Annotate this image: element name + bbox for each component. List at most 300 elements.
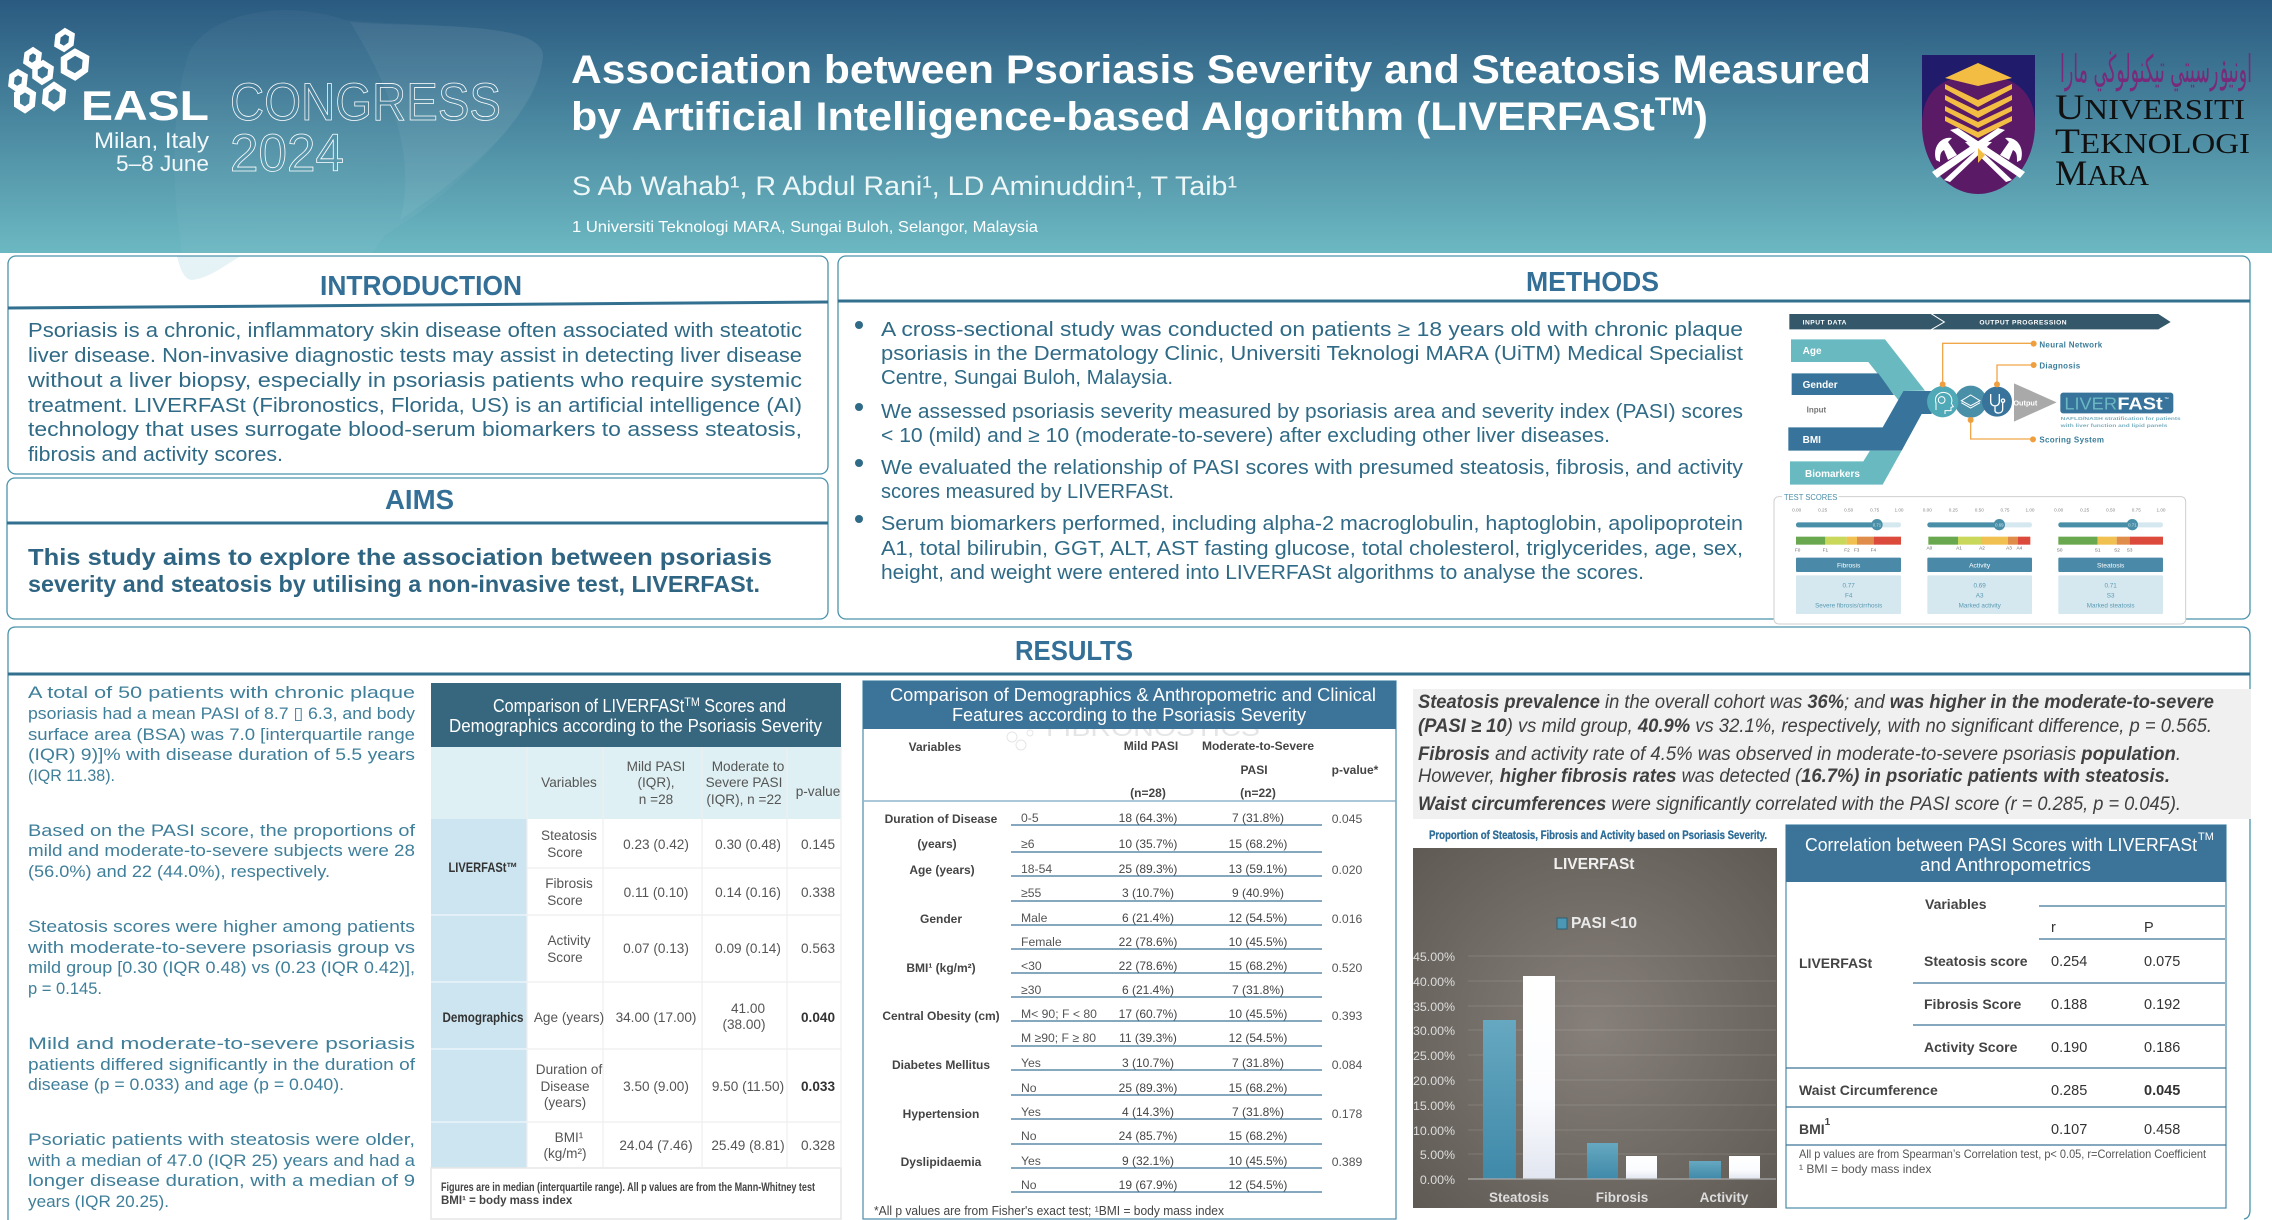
introduction text xyxy=(27,320,802,466)
column headers: n =28 xyxy=(639,792,673,807)
label: neural network: Neural Network xyxy=(2039,341,2103,350)
r and P values: 0.186 xyxy=(2144,1040,2180,1056)
rows: 0.07 (0.13) xyxy=(623,941,689,956)
introduction text: liver disease. Non-invasive diagnostic tests may assist in detecting liver disease xyxy=(28,345,802,367)
row categories: Male xyxy=(1021,911,1048,925)
affiliation: 1 Universiti Teknologi MARA, Sungai Buloh, Selangor, Malaysia xyxy=(572,219,1038,236)
r and P values: 0.188 xyxy=(2051,997,2087,1013)
table heading: Comparison of LIVERFASt xyxy=(493,696,706,716)
y axis labels xyxy=(1413,950,1455,1187)
output arrow: Output xyxy=(2013,398,2038,407)
moderate-to-severe values: 7 (31.8%) xyxy=(1232,983,1284,997)
icon: layers xyxy=(1961,395,1980,408)
score: activity: A0 xyxy=(1926,546,1933,551)
methods bullet 2: We assessed psoriasis severity measured by psoriasis area and severity index (PASI) scores xyxy=(881,401,1743,423)
methods bullet 3 xyxy=(855,457,1743,503)
row categories: No xyxy=(1021,1129,1037,1143)
row rules xyxy=(1011,825,1322,1192)
moderate-to-severe values: 10 (45.5%) xyxy=(1229,1154,1287,1168)
rows: Activity xyxy=(547,933,591,948)
results paragraph 2: Based on the PASI score, the proportions of xyxy=(28,821,415,840)
moderate-to-severe values: 12 (54.5%) xyxy=(1229,1031,1287,1045)
results paragraph 3: Steatosis scores were higher among patients xyxy=(28,917,415,936)
mild PASI values: 22 (78.6%) xyxy=(1119,935,1177,949)
heading: introduction: INTRODUCTION xyxy=(320,270,522,301)
watermark xyxy=(1007,715,1260,750)
results paragraph 1 xyxy=(28,683,416,785)
watermark: FIBRONOSTICS xyxy=(1046,715,1260,742)
methods bullet 2: < 10 (mild) and ≥ 10 (moderate-to-severe) after excluding other liver diseases. xyxy=(881,425,1610,447)
score: steatosis: S0 xyxy=(2057,548,2063,553)
results paragraph 4 xyxy=(28,1034,415,1094)
EASL Congress logo: EASL xyxy=(81,82,209,129)
row group labels: Dyslipidaemia xyxy=(901,1155,982,1169)
methods bullet 1: A cross-sectional study was conducted on patients ≥ 18 years old with chronic plaque xyxy=(881,319,1743,341)
score: steatosis: 1.00 xyxy=(2156,508,2166,513)
table heading: Demographics according to the Psoriasis Severity xyxy=(449,716,822,736)
score: activity: A3 xyxy=(2006,546,2012,551)
bar chart: LIVERFASt proportions xyxy=(1413,848,1777,1208)
score: steatosis: Steatosis xyxy=(2097,563,2125,570)
rows: Score xyxy=(547,950,583,965)
score: steatosis: Marked steatosis xyxy=(2087,603,2135,610)
row categories: Female xyxy=(1021,935,1062,949)
EASL Congress logo: 2024 xyxy=(230,124,344,183)
rows: 9.50 (11.50) xyxy=(712,1079,784,1094)
row group labels: Diabetes Mellitus xyxy=(892,1058,990,1072)
row categories: Yes xyxy=(1021,1154,1041,1168)
score: activity: 1.00 xyxy=(2025,508,2035,513)
key findings box: (PASI ≥ 10) vs mild group, 40.9% vs 32.1%, respectively, with no significant difference, p = 0.565. xyxy=(1418,716,2212,737)
moderate-to-severe values: 15 (68.2%) xyxy=(1229,959,1287,973)
input: age: Age xyxy=(1803,346,1822,357)
r and P values xyxy=(2051,920,2180,1138)
rows: 25.49 (8.81) xyxy=(711,1138,785,1153)
row group labels: Central Obesity (cm) xyxy=(882,1009,1000,1023)
p values: 0.020 xyxy=(1332,863,1362,877)
x axis labels: Activity xyxy=(1700,1190,1749,1205)
chart legend: PASI <10 xyxy=(1571,915,1637,932)
table: demographics and clinical features xyxy=(863,681,1396,1219)
rows: (38.00) xyxy=(722,1017,766,1032)
methods diagram: LIVERFASt algorithm xyxy=(1774,314,2186,624)
moderate-to-severe values: 15 (68.2%) xyxy=(1229,837,1287,851)
row group labels: BMI¹ (kg/m²) xyxy=(906,961,976,975)
y axis labels: 45.00% xyxy=(1413,950,1455,964)
rows: Duration of xyxy=(536,1062,602,1077)
row categories: No xyxy=(1021,1178,1037,1192)
mild PASI values xyxy=(1119,811,1177,1192)
LIVERFASt caption: NAFLD/NASH stratification for patients xyxy=(2061,416,2181,422)
r and P values: 0.285 xyxy=(2051,1083,2087,1099)
variable labels: 1 xyxy=(1825,1117,1831,1128)
connector lines xyxy=(1943,343,2033,439)
p values: 0.045 xyxy=(1332,812,1362,826)
y axis labels: 0.00% xyxy=(1420,1173,1455,1187)
score: steatosis: 0.71 xyxy=(2104,583,2117,590)
score: steatosis: S2 xyxy=(2114,548,2120,553)
row categories: ≥30 xyxy=(1021,983,1041,997)
results paragraph 4: patients differed significantly in the duration of xyxy=(28,1055,415,1074)
rows: 0.23 (0.42) xyxy=(623,837,689,852)
column headers: Moderate-to-Severe xyxy=(1202,739,1314,753)
r and P values: 0.192 xyxy=(2144,997,2180,1013)
title: TM xyxy=(1655,93,1694,121)
introduction text: technology that uses surrogate blood-serum biomarkers to assess steatosis, xyxy=(28,419,802,441)
rows: Age (years) xyxy=(534,1010,604,1025)
score: activity: A1 xyxy=(1956,546,1962,551)
arrow: input data xyxy=(1789,314,1943,329)
panel: test scores: TEST SCORES xyxy=(1784,493,1837,502)
key findings box: Fibrosis and activity rate of 4.5% was observed in moderate-to-severe psoriasis population. xyxy=(1418,744,2181,765)
column headers: Moderate to xyxy=(712,759,784,774)
label: diagnosis: Diagnosis xyxy=(2039,362,2081,371)
results paragraph 5: with a median of 47.0 (IQR 25) years and had a xyxy=(27,1151,416,1170)
results summary text xyxy=(27,683,416,1211)
mild PASI values: 19 (67.9%) xyxy=(1119,1178,1177,1192)
moderate-to-severe values: 10 (45.5%) xyxy=(1229,1007,1287,1021)
score: steatosis xyxy=(2054,508,2166,614)
mild PASI values: 25 (89.3%) xyxy=(1119,862,1177,876)
results paragraph 5: years (IQR 20.25). xyxy=(28,1192,169,1211)
column headers: Variables xyxy=(909,740,962,754)
r and P values: 0.254 xyxy=(2051,954,2087,970)
header banner xyxy=(0,0,2272,253)
moderate-to-severe values: 12 (54.5%) xyxy=(1229,1178,1287,1192)
key findings box: However, higher fibrosis rates was detected (16.7%) in psoriatic patients with steatosis. xyxy=(1418,766,2170,787)
moderate-to-severe values: 15 (68.2%) xyxy=(1229,1081,1287,1095)
EASL Congress logo: Milan, Italy xyxy=(94,128,209,153)
bars: steatosis xyxy=(1483,976,1555,1179)
score: activity xyxy=(1923,508,2035,614)
score: steatosis: 0.50 xyxy=(2106,508,2116,513)
column headers xyxy=(541,759,840,807)
methods bullet 4 xyxy=(855,513,1743,584)
y axis labels: 30.00% xyxy=(1413,1024,1455,1038)
score: fibrosis: 0.00 xyxy=(1792,508,1802,513)
column headers: Variables xyxy=(541,775,597,790)
score: steatosis: 0.25 xyxy=(2080,508,2090,513)
EASL Congress logo: 5–8 June xyxy=(116,151,209,176)
results paragraph 5 xyxy=(27,1130,416,1211)
results paragraph 1: (IQR) 9)]% with disease duration of 5.5 years xyxy=(28,745,415,764)
results paragraph 1: A total of 50 patients with chronic plaque xyxy=(28,683,415,702)
y axis labels: 20.00% xyxy=(1413,1074,1455,1088)
LIVERFASt logo: ™ xyxy=(2164,397,2169,402)
LIVERFASt logo: FASt xyxy=(2117,393,2163,413)
y axis labels: 25.00% xyxy=(1413,1049,1455,1063)
title: by Artificial Intelligence-based Algorithm (LIVERFASt xyxy=(571,95,1579,139)
score: activity: 0.75 xyxy=(2000,508,2010,513)
variable labels: Steatosis score xyxy=(1924,953,2028,969)
mild PASI values: 22 (78.6%) xyxy=(1119,959,1177,973)
moderate-to-severe values: 7 (31.8%) xyxy=(1232,811,1284,825)
table heading xyxy=(449,695,822,736)
score: fibrosis: 0.25 xyxy=(1818,508,1828,513)
y axis labels: 5.00% xyxy=(1420,1148,1455,1162)
UiTM wordmark xyxy=(2055,47,2252,193)
table footnote: All p values are from Spearman’s Correlation test, p< 0.05, r=Correlation Coefficient xyxy=(1799,1147,2207,1161)
title: Association between Psoriasis Severity and Steatosis Measured xyxy=(571,48,1871,92)
mild PASI values: 6 (21.4%) xyxy=(1122,911,1174,925)
results paragraph 5: Psoriatic patients with steatosis were older, xyxy=(28,1130,415,1149)
rows: Score xyxy=(547,893,583,908)
table footnote: *All p values are from Fisher's exact test; ¹BMI = body mass index xyxy=(874,1204,1225,1218)
rows xyxy=(534,828,835,1161)
score: steatosis: S3 xyxy=(2127,548,2133,553)
UiTM wordmark: TEKNOLOGI xyxy=(2055,121,2250,161)
score: activity: 0.25 xyxy=(1949,508,1958,513)
column headers: p-value xyxy=(796,784,840,799)
input: BMI xyxy=(1788,391,1932,451)
results paragraph 3: p = 0.145. xyxy=(28,979,102,998)
rows: 0.09 (0.14) xyxy=(715,941,781,956)
r and P values: 0.190 xyxy=(2051,1040,2087,1056)
variable labels: LIVERFASt xyxy=(1799,955,1872,971)
row categories: <30 xyxy=(1021,959,1042,973)
rows: 24.04 (7.46) xyxy=(619,1138,693,1153)
score: steatosis: 0.00 xyxy=(2054,508,2064,513)
bars: activity xyxy=(1689,1156,1760,1179)
bars: fibrosis xyxy=(1587,1143,1657,1179)
score: fibrosis: F4 xyxy=(1845,593,1853,600)
rows: (years) xyxy=(544,1095,586,1110)
score: fibrosis: 0.50 xyxy=(1844,508,1854,513)
rows: 34.00 (17.00) xyxy=(616,1010,696,1025)
mild PASI values: 18 (64.3%) xyxy=(1119,811,1177,825)
moderate-to-severe values: 12 (54.5%) xyxy=(1229,911,1287,925)
title: ) xyxy=(1694,95,1708,139)
methods bullet 1 xyxy=(855,319,1743,389)
results paragraph 3: mild group [0.30 (IQR 0.48) vs (0.23 (IQR 0.42)], xyxy=(28,958,415,977)
heading: results: RESULTS xyxy=(1015,635,1133,666)
score: fibrosis: F2 xyxy=(1844,548,1850,553)
table footnote: Figures are in median (interquartile range). All p values are from the Mann-Whitney test xyxy=(441,1182,815,1194)
row categories: M ≥90; F ≥ 80 xyxy=(1021,1031,1096,1045)
mild PASI values: 11 (39.3%) xyxy=(1119,1031,1177,1045)
rows: 0.328 xyxy=(801,1138,835,1153)
variable labels: Variables xyxy=(1925,896,1987,912)
methods bullet 2 xyxy=(855,401,1743,447)
y axis labels: 35.00% xyxy=(1413,1000,1455,1014)
LIVERFASt logo: LIVER xyxy=(2064,393,2117,413)
results paragraph 2: (56.0%) and 22 (44.0%), respectively. xyxy=(28,862,330,881)
introduction text: without a liver biopsy, especially in psoriasis patients who require systemic xyxy=(27,370,802,392)
x axis labels xyxy=(1489,1190,1749,1205)
table heading: Features according to the Psoriasis Severity xyxy=(952,705,1306,725)
table heading: Correlation between PASI Scores with LIVERFASt xyxy=(1805,835,2197,855)
row group labels: Duration of Disease xyxy=(885,812,998,826)
icon: UiTM crest xyxy=(1922,55,2035,194)
score: fibrosis: F0 xyxy=(1795,548,1801,553)
icon: stethoscope xyxy=(1991,394,2005,413)
input: biomarkers xyxy=(1790,451,1902,485)
row categories: Yes xyxy=(1021,1105,1041,1119)
r and P values: 0.045 xyxy=(2144,1083,2180,1099)
moderate-to-severe values: 13 (59.1%) xyxy=(1229,862,1287,876)
moderate-to-severe values: 9 (40.9%) xyxy=(1232,886,1284,900)
row categories: ≥6 xyxy=(1021,837,1035,851)
column headers: (n=22) xyxy=(1240,786,1276,800)
aims text xyxy=(28,544,772,597)
table: correlation xyxy=(1786,825,2226,1208)
score: fibrosis: F4 xyxy=(1871,548,1876,553)
y axis labels: 40.00% xyxy=(1413,975,1455,989)
key findings box xyxy=(1413,689,2251,819)
row group labels: (years) xyxy=(917,837,957,851)
table footnote: ¹ BMI = body mass index xyxy=(1799,1162,1931,1176)
rows: 0.30 (0.48) xyxy=(715,837,781,852)
chart title: Proportion of Steatosis, Fibrosis and Activity based on Psoriasis Severity. xyxy=(1429,830,1767,842)
score: fibrosis: Fibrosis xyxy=(1837,563,1861,570)
panel: test scores xyxy=(1774,493,2186,624)
row categories: M< 90; F < 80 xyxy=(1021,1007,1097,1021)
mild PASI values: 3 (10.7%) xyxy=(1122,886,1174,900)
rows: 0.040 xyxy=(801,1010,835,1025)
results paragraph 3: with moderate-to-severe psoriasis group vs xyxy=(27,938,415,957)
p values: 0.016 xyxy=(1332,912,1362,926)
chart heading: LIVERFASt xyxy=(1554,856,1634,873)
table heading: TM xyxy=(684,695,700,709)
methods bullet 1: Centre, Sungai Buloh, Malaysia. xyxy=(881,367,1173,389)
input: biomarkers: Biomarkers xyxy=(1805,469,1860,480)
column headers: Mild PASI xyxy=(627,759,685,774)
table footnote: BMI¹ = body mass index xyxy=(441,1195,573,1207)
row labels xyxy=(442,860,524,1025)
y axis labels: 10.00% xyxy=(1413,1124,1455,1138)
row labels: LIVERFASt™ xyxy=(448,860,518,875)
mild PASI values: 4 (14.3%) xyxy=(1122,1105,1174,1119)
moderate-to-severe values: 7 (31.8%) xyxy=(1232,1105,1284,1119)
p values: 0.393 xyxy=(1332,1009,1362,1023)
arrow: input data: INPUT DATA xyxy=(1803,320,1847,327)
rows: BMI¹ xyxy=(555,1130,584,1145)
row group labels: Gender xyxy=(920,912,962,926)
moderate-to-severe values: 15 (68.2%) xyxy=(1229,1129,1287,1143)
rows: Disease xyxy=(540,1079,590,1094)
mild PASI values: 3 (10.7%) xyxy=(1122,1056,1174,1070)
row categories: 0-5 xyxy=(1021,811,1039,825)
rows: 0.14 (0.16) xyxy=(715,885,781,900)
results paragraph 2 xyxy=(28,821,415,881)
table heading: Comparison of Demographics & Anthropometric and Clinical xyxy=(890,685,1376,705)
UiTM wordmark: UNIVERSITI xyxy=(2055,87,2245,127)
rows: 0.145 xyxy=(801,837,835,852)
rows: Steatosis xyxy=(541,828,597,843)
results paragraph 5: longer disease duration, with a median of 9 xyxy=(28,1171,415,1190)
column headers: Mild PASI xyxy=(1124,739,1178,753)
table heading xyxy=(1805,831,2214,875)
y axis labels: 15.00% xyxy=(1413,1099,1455,1113)
variable labels: Fibrosis Score xyxy=(1924,996,2021,1012)
key findings box: Steatosis prevalence in the overall cohort was 36%; and was higher in the moderate-to-severe xyxy=(1418,692,2214,713)
row categories: No xyxy=(1021,1081,1037,1095)
column headers xyxy=(909,739,1379,800)
column headers: p-value* xyxy=(1332,763,1379,777)
variable labels: Activity Score xyxy=(1924,1039,2018,1055)
column headers: (IQR), n =22 xyxy=(706,792,782,807)
rows: Fibrosis xyxy=(545,876,593,891)
EASL Congress logo xyxy=(11,31,501,183)
p values: 0.084 xyxy=(1332,1058,1362,1072)
score: fibrosis: F3 xyxy=(1854,548,1860,553)
score: fibrosis: 0.71 xyxy=(1873,522,1882,527)
mild PASI values: 10 (35.7%) xyxy=(1119,837,1177,851)
r and P values: r xyxy=(2051,920,2056,936)
results paragraph 3 xyxy=(27,917,415,998)
score: steatosis: S3 xyxy=(2107,593,2115,600)
rows: 41.00 xyxy=(731,1001,765,1016)
score: fibrosis: 1.00 xyxy=(1894,508,1904,513)
methods bullet 3: We evaluated the relationship of PASI scores with presumed steatosis, fibrosis, and activity xyxy=(881,457,1743,479)
row categories: Yes xyxy=(1021,1056,1041,1070)
mild PASI values: 24 (85.7%) xyxy=(1119,1129,1177,1143)
column headers: PASI xyxy=(1240,763,1268,777)
output arrow xyxy=(2013,383,2057,422)
rows: (kg/m²) xyxy=(543,1146,587,1161)
row categories: ≥55 xyxy=(1021,886,1041,900)
row group labels: Age (years) xyxy=(909,863,975,877)
r and P values: 0.458 xyxy=(2144,1122,2180,1138)
methods bullet 4: height, and weight were entered into LIVERFASt algorithms to analyse the scores. xyxy=(881,562,1644,584)
score: activity: A3 xyxy=(1976,593,1984,600)
r and P values: P xyxy=(2144,920,2154,936)
LIVERFASt logo xyxy=(2060,393,2173,413)
introduction text: Psoriasis is a chronic, inflammatory skin disease often associated with steatotic xyxy=(28,320,802,342)
moderate-to-severe values: 10 (45.5%) xyxy=(1229,935,1287,949)
panel: methods xyxy=(838,256,2250,619)
rows: 0.563 xyxy=(801,941,835,956)
column headers: (n=28) xyxy=(1130,786,1166,800)
connector dots xyxy=(1940,341,2037,442)
score: activity: 0.69 xyxy=(1974,583,1986,590)
rows: 0.338 xyxy=(801,885,835,900)
table heading: and Anthropometrics xyxy=(1920,855,2091,875)
table footnote xyxy=(1799,1147,2207,1176)
score: activity: A4 xyxy=(2016,546,2023,551)
score: steatosis: S1 xyxy=(2095,548,2101,553)
p values xyxy=(1332,812,1362,1169)
methods bullet 4: A1, total bilirubin, GGT, ALT, AST fasting glucose, total cholesterol, triglycerides, age, sex, xyxy=(881,538,1743,560)
score: fibrosis: 0.75 xyxy=(1870,508,1880,513)
methods bullet 1: psoriasis in the Dermatology Clinic, Universiti Teknologi MARA (UiTM) Medical Specialist xyxy=(881,343,1743,365)
rows: 3.50 (9.00) xyxy=(623,1079,689,1094)
aims text: This study aims to explore the association between psoriasis xyxy=(28,544,772,570)
LIVERFASt caption: with liver function and lipid panels xyxy=(2059,423,2168,429)
mild PASI values: 17 (60.7%) xyxy=(1119,1007,1177,1021)
heading: aims: AIMS xyxy=(385,484,454,515)
score: activity: Marked activity xyxy=(1959,603,2002,610)
LIVERFASt caption xyxy=(2059,416,2181,429)
score: fibrosis xyxy=(1792,508,1904,614)
moderate-to-severe values: 7 (31.8%) xyxy=(1232,1056,1284,1070)
mild PASI values: 25 (89.3%) xyxy=(1119,1081,1177,1095)
EASL Congress logo: CONGRESS xyxy=(230,73,501,132)
results paragraph 4: Mild and moderate-to-severe psoriasis xyxy=(28,1034,415,1053)
label: scoring system: Scoring System xyxy=(2039,436,2104,445)
input: gender xyxy=(1792,373,1894,395)
authors: S Ab Wahab¹, R Abdul Rani¹, LD Aminuddin¹, T Taib¹ xyxy=(572,171,1237,201)
methods bullet 3: scores measured by LIVERFASt. xyxy=(881,481,1174,503)
results paragraph 2: mild and moderate-to-severe subjects were 28 xyxy=(28,841,415,860)
results paragraph 4: disease (p = 0.033) and age (p = 0.040). xyxy=(28,1075,344,1094)
x axis labels: Fibrosis xyxy=(1596,1190,1648,1205)
input: gender: Gender xyxy=(1803,380,1838,391)
score: activity: A2 xyxy=(1979,546,1985,551)
variable labels: BMI xyxy=(1799,1121,1825,1137)
introduction text: fibrosis and activity scores. xyxy=(28,444,283,466)
table heading: Scores and xyxy=(700,696,786,716)
